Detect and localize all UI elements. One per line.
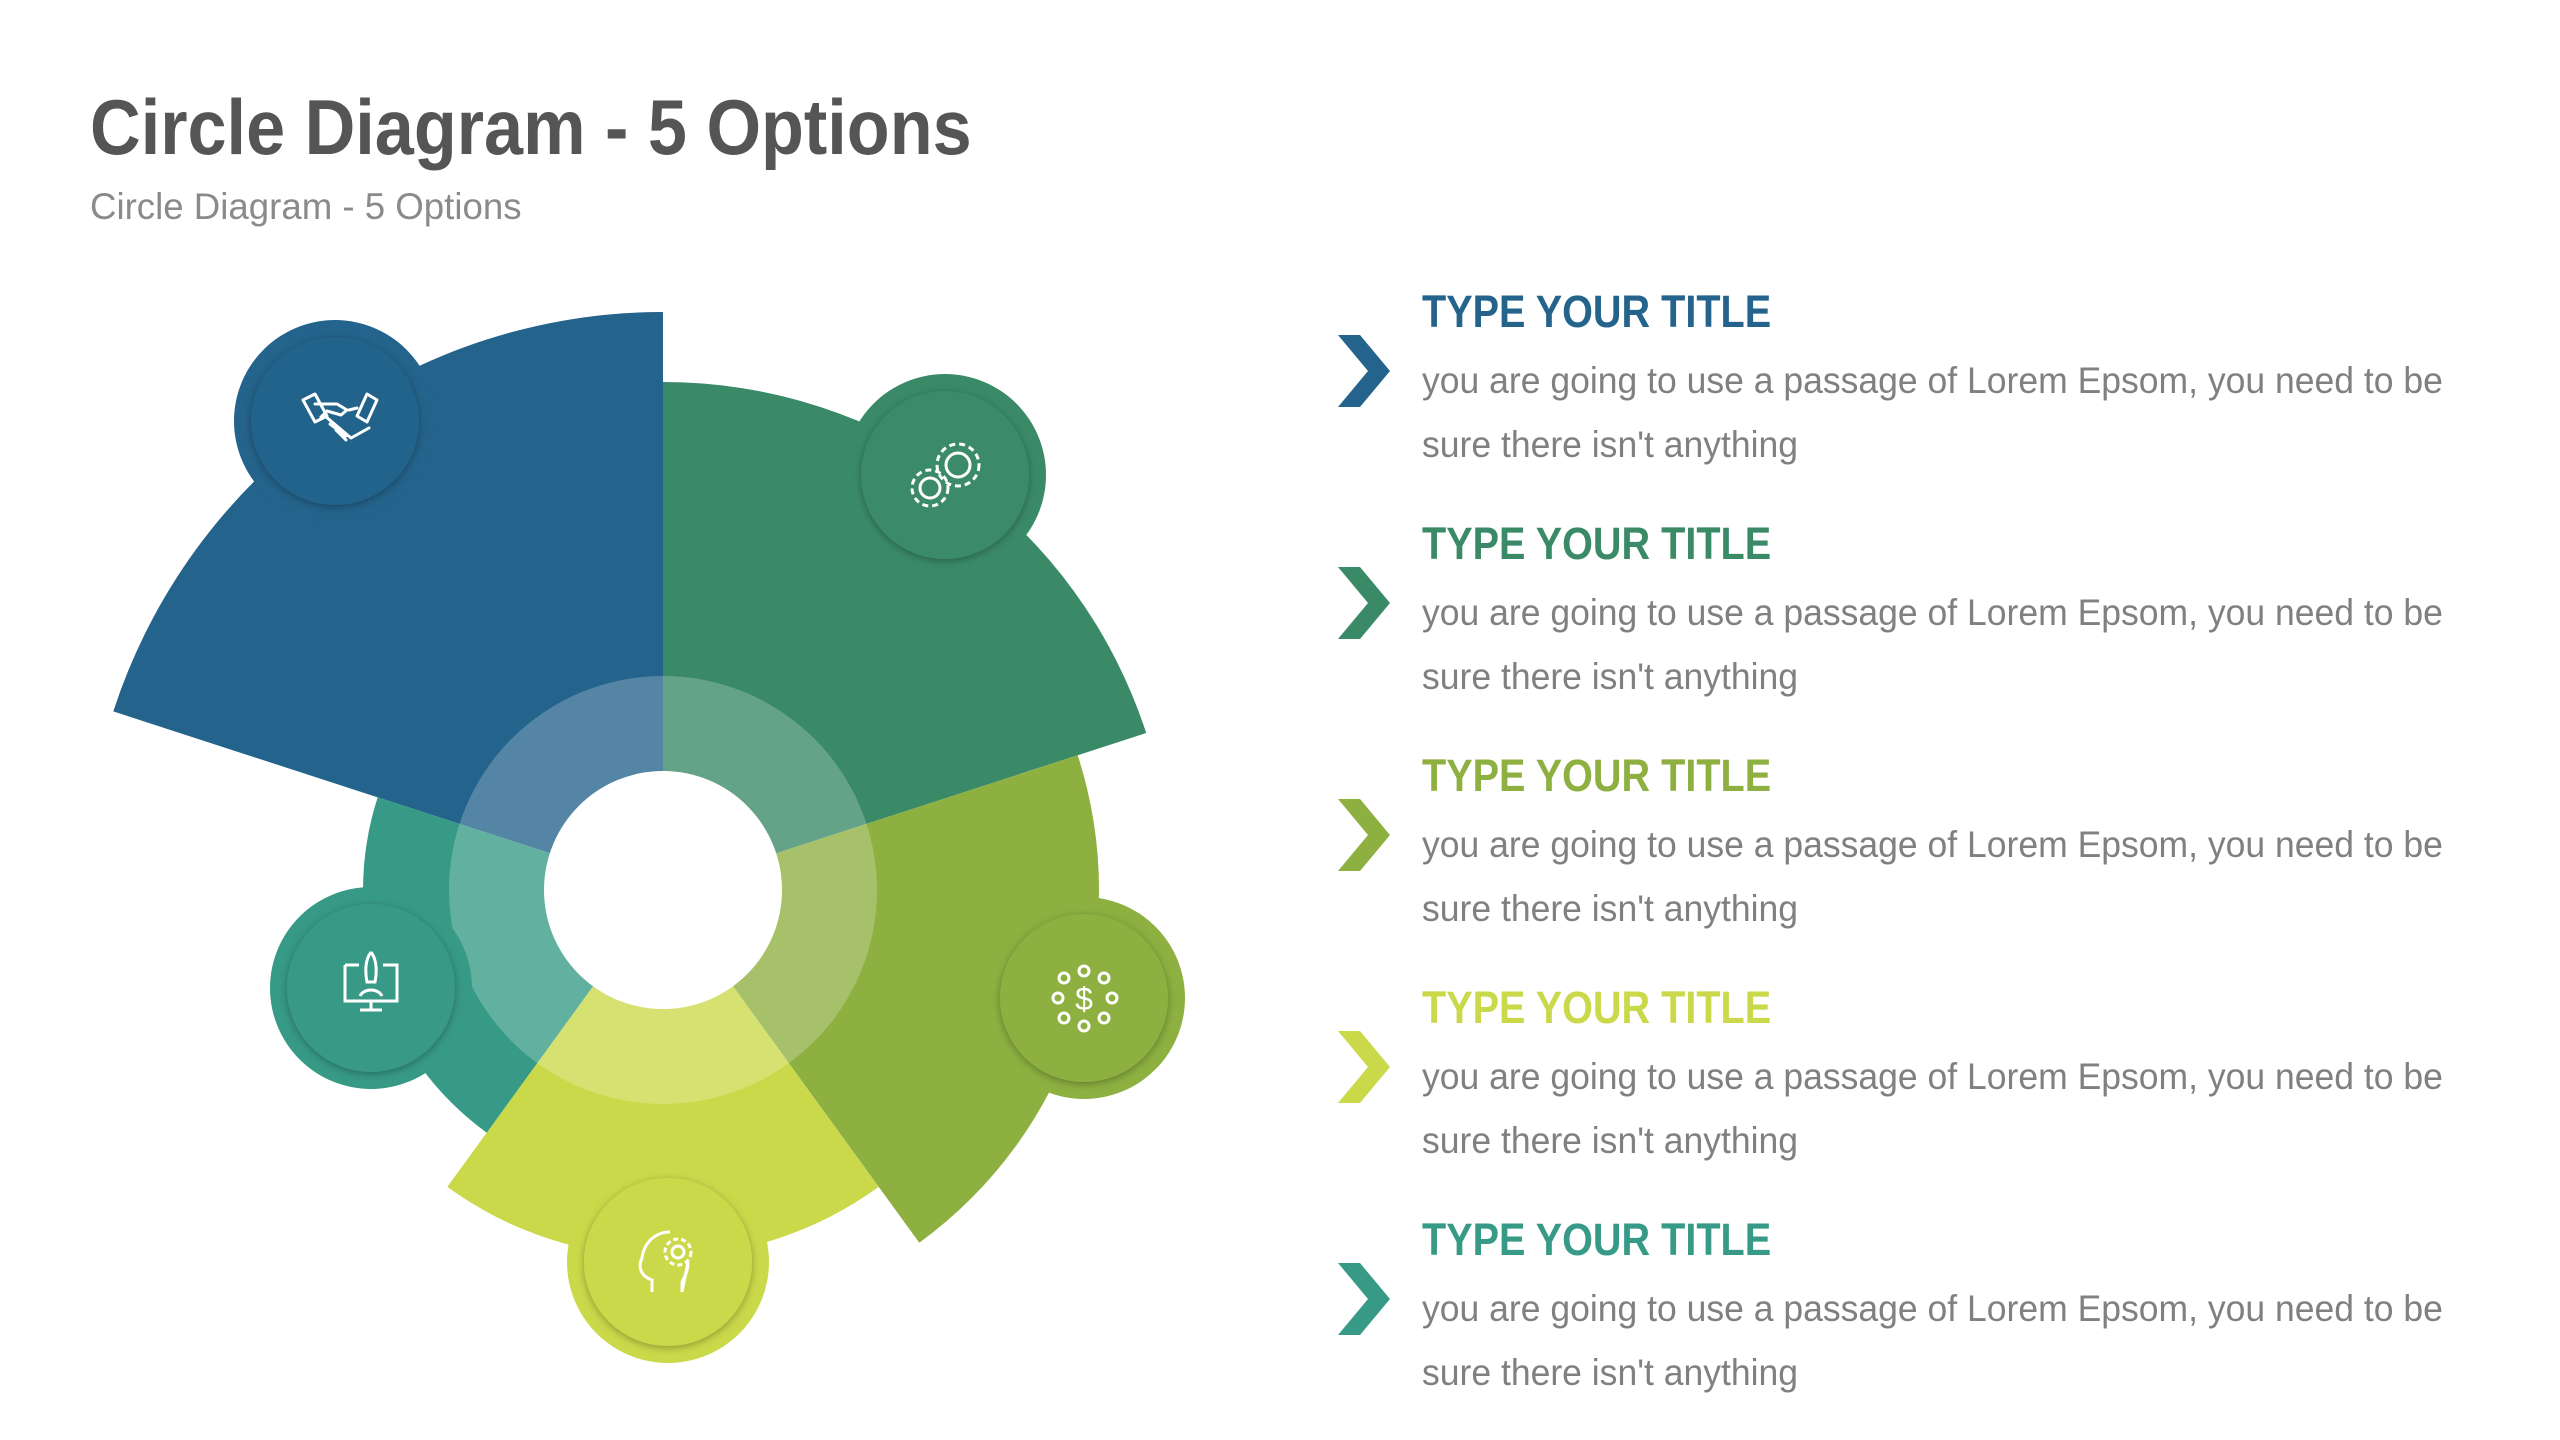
item 4 [1338,982,2443,1161]
icon circle: network dollar: $ [1075,981,1093,1017]
sector: olive [663,755,1099,1243]
body 2: you are going to use a passage of Lorem Epsom, you need to be [1422,592,2443,633]
sector: teal [363,797,663,1133]
body 4: sure there isn't anything [1422,1120,1798,1161]
chevron 5 [1338,1263,1390,1335]
body 1 [1422,360,2443,465]
icon circle: network dollar [983,897,1185,1099]
body 2 [1422,592,2443,697]
sector: blue [113,312,663,890]
heading 4: TYPE YOUR TITLE [1422,982,1771,1033]
body 5: you are going to use a passage of Lorem Epsom, you need to be [1422,1288,2443,1329]
icon circle: handshake [234,320,436,522]
body 3: sure there isn't anything [1422,888,1798,929]
subtitle: Circle Diagram - 5 Options [90,186,522,227]
body 3 [1422,824,2443,929]
sector: yellow [447,890,879,1257]
icon circle: rocket monitor [270,887,472,1089]
circle diagram [113,312,1185,1363]
icon circle: head gear [567,1161,769,1363]
heading 3: TYPE YOUR TITLE [1422,750,1771,801]
body 5: sure there isn't anything [1422,1352,1798,1393]
heading 1: TYPE YOUR TITLE [1422,286,1771,337]
heading 5: TYPE YOUR TITLE [1422,1214,1771,1265]
body 4: you are going to use a passage of Lorem Epsom, you need to be [1422,1056,2443,1097]
inner ring [449,676,877,1104]
body 5 [1422,1288,2443,1393]
chevron 1 [1338,335,1390,407]
item 5 [1338,1214,2443,1393]
chevron 3 [1338,799,1390,871]
chevron 2 [1338,567,1390,639]
sector: green [663,382,1146,890]
body 3: you are going to use a passage of Lorem Epsom, you need to be [1422,824,2443,865]
center hole [544,771,782,1009]
heading 2: TYPE YOUR TITLE [1422,518,1771,569]
title: Circle Diagram - 5 Options [90,83,972,171]
body 1: sure there isn't anything [1422,424,1798,465]
chevron 4 [1338,1031,1390,1103]
item 3 [1338,750,2443,929]
item 2 [1338,518,2443,697]
body 2: sure there isn't anything [1422,656,1798,697]
icon circle: gears [844,374,1046,576]
body 4 [1422,1056,2443,1161]
body 1: you are going to use a passage of Lorem Epsom, you need to be [1422,360,2443,401]
item 1 [1338,286,2443,465]
